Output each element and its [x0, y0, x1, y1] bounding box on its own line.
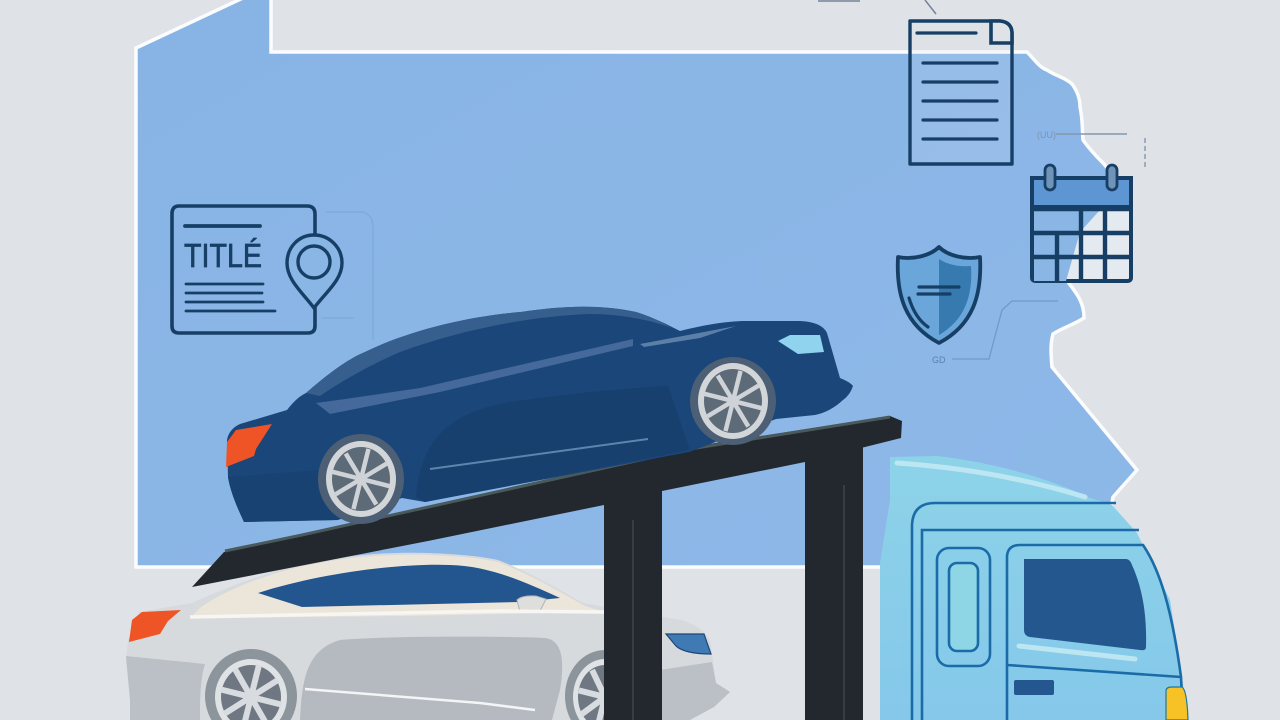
top callout marks [818, 0, 936, 14]
icon: calendar [1032, 165, 1131, 281]
roof highlight [897, 463, 1085, 497]
door outline [1007, 545, 1183, 720]
cab outlines [912, 503, 1139, 720]
lower sill highlight [305, 689, 535, 710]
icon: title document with location pin [172, 206, 342, 333]
side vent inner [949, 563, 978, 651]
front wheel [690, 357, 776, 445]
tail light [226, 424, 272, 467]
rear wheel [318, 434, 404, 524]
document text lines [186, 284, 275, 311]
side panel [300, 637, 562, 720]
calendar body [1032, 178, 1131, 281]
headlight [666, 634, 711, 654]
callout label: (UU) [1037, 130, 1056, 140]
shield emblem lines [909, 287, 959, 327]
silver car [126, 553, 730, 720]
rear lower shade [228, 470, 338, 522]
calendar grid [1032, 209, 1131, 281]
rear wheel [205, 649, 297, 720]
front post [805, 438, 863, 720]
marker light [1166, 687, 1188, 720]
calendar header [1032, 178, 1131, 207]
truck window [1024, 559, 1146, 650]
front wheel [565, 650, 645, 720]
cab body [880, 456, 1188, 720]
ramp lift [192, 416, 902, 720]
document heading rule [185, 224, 260, 228]
faint shield callout [932, 301, 1058, 365]
car lower shade left [126, 656, 205, 720]
faint leader lines [322, 212, 373, 340]
callout label: GD [932, 355, 946, 365]
side vent outer [937, 548, 990, 666]
icon: shield [898, 247, 980, 343]
faint callout near calendar [1037, 130, 1145, 170]
folded corner [991, 21, 1012, 43]
shield dark half [939, 259, 971, 335]
text lines [917, 33, 997, 139]
state map outline [136, 0, 1137, 567]
icon: document [910, 21, 1012, 164]
shield outline [898, 247, 980, 343]
tail light [129, 610, 181, 642]
pin centre [298, 246, 330, 278]
post highlights [633, 485, 844, 720]
roof trim [306, 307, 672, 396]
delivery truck [880, 456, 1188, 720]
rear post [604, 488, 662, 720]
beltline highlight [190, 611, 604, 617]
sill highlight [1019, 646, 1135, 659]
callout line [952, 301, 1058, 359]
ramp top edge [225, 417, 890, 551]
ramp deck [192, 416, 902, 587]
car lower shade right [640, 662, 730, 720]
calendar rings [1045, 165, 1055, 190]
document frame [172, 206, 315, 333]
lower shade panel [416, 386, 690, 502]
location pin [287, 235, 342, 308]
car body [227, 307, 853, 522]
car window [258, 565, 560, 607]
door handle [1014, 680, 1054, 695]
side mirror [517, 596, 546, 612]
title word: TITLÉ [184, 237, 262, 274]
blue car on ramp [226, 307, 853, 524]
sheet [910, 21, 1012, 164]
headlight [778, 335, 824, 354]
sill line [430, 439, 648, 469]
beltline trim [316, 339, 633, 414]
blue part of calendar body [1034, 210, 1100, 281]
hood trim [640, 326, 736, 347]
car body [126, 553, 730, 720]
roof trim [190, 555, 604, 618]
